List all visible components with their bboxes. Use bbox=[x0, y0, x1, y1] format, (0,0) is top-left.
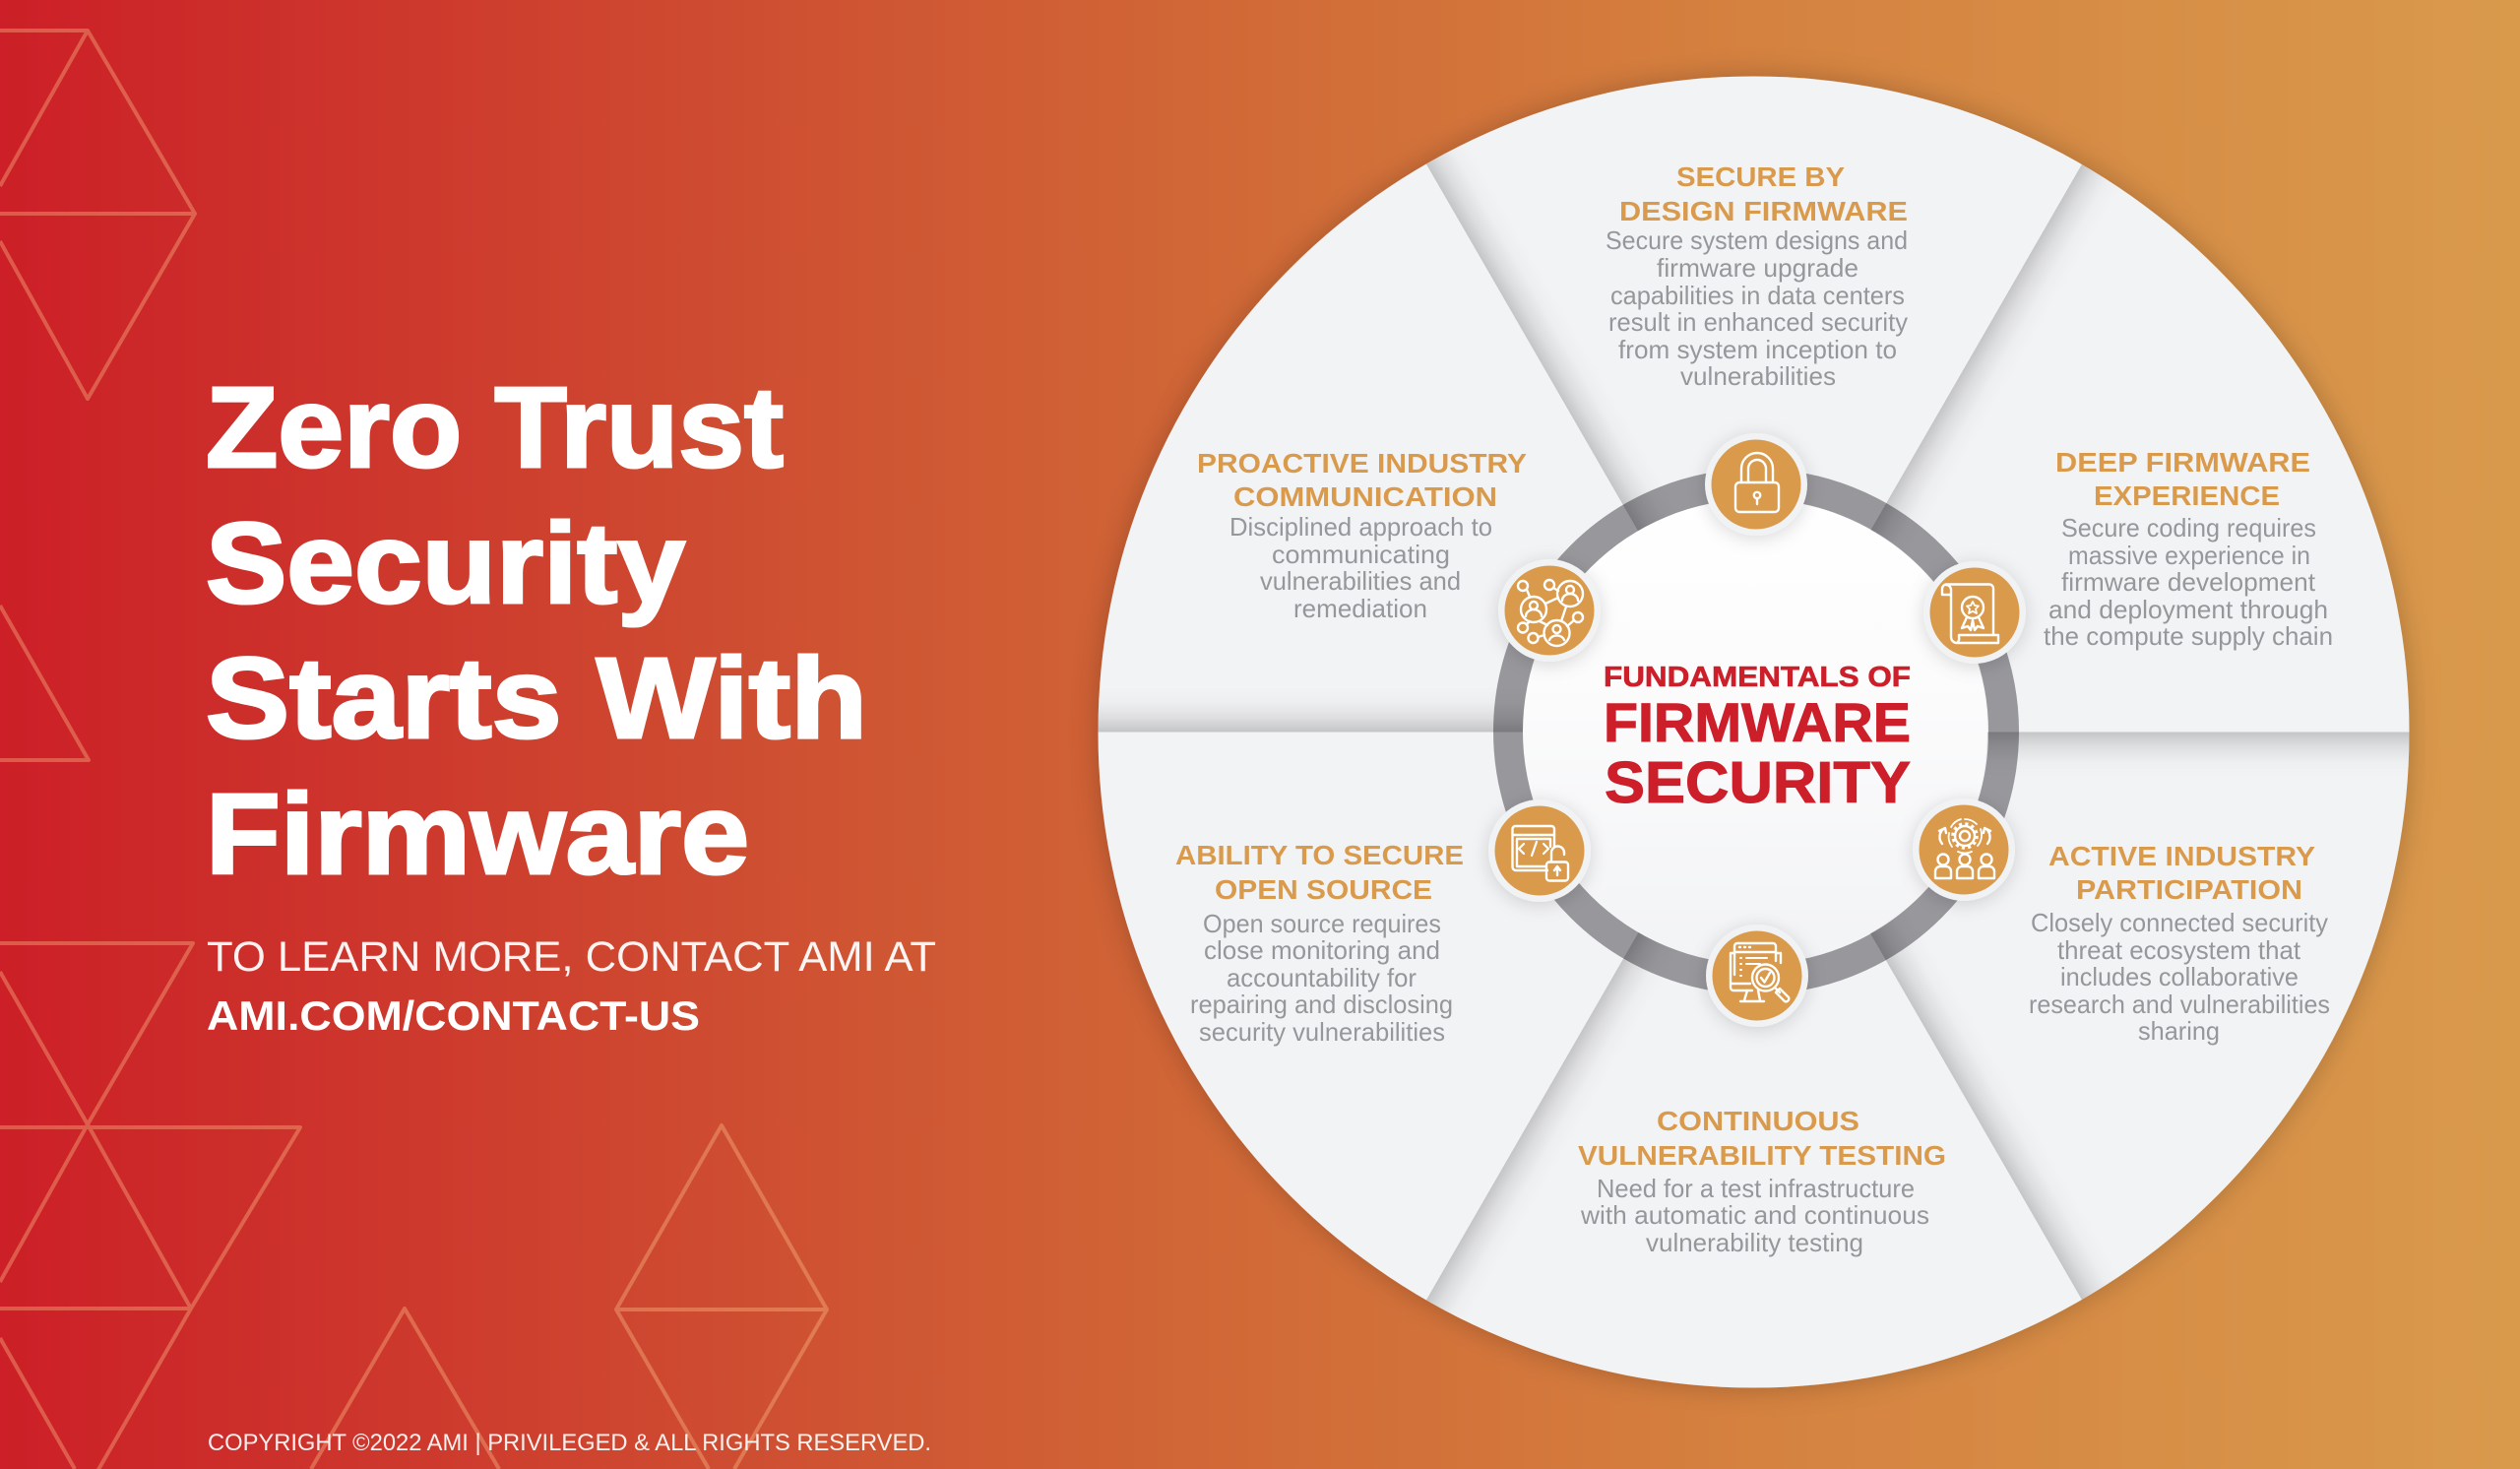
panel: proactive industry communication: Disciplined approach to bbox=[1229, 512, 1492, 542]
panel: deep firmware experience: Secure coding requires bbox=[2061, 513, 2316, 543]
panel: continuous vulnerability testing: with automatic and continuous bbox=[1580, 1200, 1929, 1230]
center heading bbox=[1604, 662, 1911, 815]
panel: deep firmware experience: EXPERIENCE bbox=[2094, 480, 2280, 511]
grey ring bbox=[1508, 484, 2004, 979]
panel: secure by design firmware: Secure system designs and bbox=[1606, 225, 1908, 255]
panel: deep firmware experience: and deployment through bbox=[2048, 595, 2328, 624]
icon: certificate scroll bbox=[1923, 561, 2026, 664]
panel: ability to secure open source: security vulnerabilities bbox=[1199, 1017, 1445, 1047]
panel: secure by design firmware: capabilities in data centers bbox=[1610, 281, 1905, 310]
icon: people with gear bbox=[1913, 798, 2015, 901]
panel: secure by design firmware: SECURE BY bbox=[1676, 161, 1845, 192]
panel: ability to secure open source: close monitoring and bbox=[1204, 935, 1440, 965]
panel: deep firmware experience: firmware development bbox=[2061, 567, 2316, 597]
panel: ability to secure open source: OPEN SOURCE bbox=[1215, 874, 1432, 905]
panel: active industry participation: Closely connected security bbox=[2031, 908, 2328, 937]
panel: active industry participation: PARTICIPATION bbox=[2076, 874, 2302, 905]
panel: continuous vulnerability testing: VULNERABILITY TESTING bbox=[1578, 1140, 1946, 1171]
panel: secure by design firmware: result in enhanced security bbox=[1608, 307, 1908, 337]
title bbox=[206, 363, 867, 898]
panel: ability to secure open source: Open source requires bbox=[1203, 909, 1441, 938]
icon: monitor with magnifier bbox=[1706, 925, 1808, 1027]
panel: ability to secure open source: repairing and disclosing bbox=[1190, 990, 1453, 1019]
panel: ability to secure open source: accountability for bbox=[1227, 963, 1417, 992]
icon: padlock bbox=[1705, 433, 1807, 536]
panel: deep firmware experience: DEEP FIRMWARE bbox=[2055, 447, 2310, 478]
icon: connected people network bbox=[1498, 559, 1601, 662]
panel: active industry participation: ACTIVE INDUSTRY bbox=[2048, 841, 2315, 871]
panel: continuous vulnerability testing: CONTINUOUS bbox=[1657, 1106, 1859, 1136]
panel: proactive industry communication: PROACTIVE INDUSTRY bbox=[1197, 448, 1527, 479]
panel: deep firmware experience bbox=[2044, 447, 2333, 651]
panel: proactive industry communication: remediation bbox=[1293, 594, 1427, 623]
panel: active industry participation: threat ecosystem that bbox=[2057, 935, 2301, 965]
decorative triangle pattern bbox=[0, 31, 827, 1469]
title: Firmware bbox=[206, 770, 749, 898]
panel: secure by design firmware: DESIGN FIRMWARE bbox=[1619, 196, 1908, 226]
panel: active industry participation: includes collaborative bbox=[2060, 962, 2299, 991]
copyright: COPYRIGHT ©2022 AMI | PRIVILEGED & ALL RIGHTS RESERVED. bbox=[208, 1430, 931, 1456]
panel: secure by design firmware: vulnerabilities bbox=[1680, 361, 1836, 391]
panel: secure by design firmware: from system inception to bbox=[1618, 335, 1897, 364]
panel: proactive industry communication: COMMUNICATION bbox=[1233, 481, 1497, 512]
panel: active industry participation bbox=[2029, 841, 2330, 1046]
center heading: FUNDAMENTALS OF bbox=[1604, 662, 1911, 693]
inner circle bbox=[1523, 499, 1987, 964]
panel: ability to secure open source bbox=[1175, 840, 1464, 1047]
panel: secure by design firmware: firmware upgrade bbox=[1657, 253, 1858, 283]
icon: code window with open lock bbox=[1488, 799, 1591, 902]
disk panel bbox=[1099, 77, 2410, 1388]
panel: ability to secure open source: ABILITY TO SECURE bbox=[1175, 840, 1464, 870]
panel: continuous vulnerability testing: Need for a test infrastructure bbox=[1597, 1174, 1915, 1203]
title: Starts With bbox=[206, 634, 867, 762]
contact call to action bbox=[207, 933, 936, 1039]
panel: proactive industry communication: vulnerabilities and bbox=[1260, 566, 1461, 596]
panel: continuous vulnerability testing bbox=[1578, 1106, 1946, 1257]
sector shadows bbox=[1085, 130, 2424, 1334]
contact call to action: AMI.COM/CONTACT-US bbox=[207, 992, 700, 1039]
panel: active industry participation: research and vulnerabilities bbox=[2029, 990, 2330, 1019]
panel: proactive industry communication bbox=[1197, 448, 1527, 623]
panel: continuous vulnerability testing: vulnerability testing bbox=[1646, 1228, 1863, 1257]
panel: deep firmware experience: the compute supply chain bbox=[2044, 621, 2333, 651]
panel: active industry participation: sharing bbox=[2138, 1016, 2220, 1046]
center heading: SECURITY bbox=[1605, 750, 1911, 815]
panel: secure by design firmware bbox=[1606, 161, 1908, 391]
title: Zero Trust bbox=[206, 363, 784, 491]
title: Security bbox=[206, 499, 685, 627]
panel: deep firmware experience: massive experience in bbox=[2068, 541, 2310, 570]
center heading: FIRMWARE bbox=[1604, 691, 1911, 753]
contact call to action: TO LEARN MORE, CONTACT AMI AT bbox=[207, 933, 936, 981]
panel: proactive industry communication: communicating bbox=[1272, 540, 1450, 569]
